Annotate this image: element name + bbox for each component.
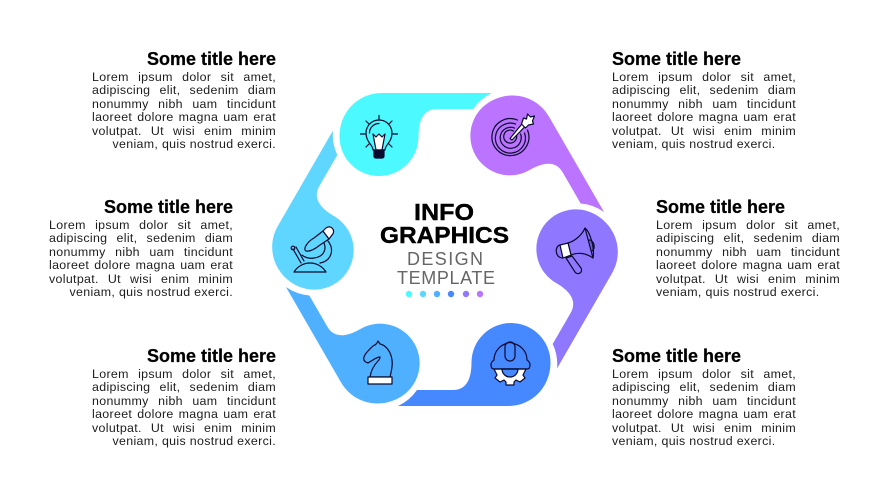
segment: purple [456,80,604,253]
text block: bottom left: Lorem ipsum dolor sit amet, [92,367,276,381]
center subtitle: DESIGN: DESIGN [407,249,483,269]
text block: middle left [49,197,233,299]
icon: microscope [291,227,334,272]
segment: cyan [340,93,492,176]
center title: INFO: INFO [414,199,474,225]
center title: GRAPHICS: GRAPHICS [380,222,509,248]
text block: middle left: adipiscing elit, sedenim diam [49,231,233,245]
icon: helmet with gear [491,342,530,385]
text block: bottom right: nonummy nibh uam tincidunt [612,394,796,408]
text block: bottom right: Some title here [612,346,741,366]
segment: light blue [257,131,405,304]
segment: blue [286,246,434,419]
text block: bottom left: nonummy nibh uam tincidunt [92,394,276,408]
text block: bottom left [92,346,276,448]
text block: middle right: laoreet dolore magna uam erat [656,258,840,272]
text block: middle right [656,197,840,299]
text block: top left: nonummy nibh uam tincidunt [92,97,276,111]
text block: bottom left: veniam, quis nostrud exerci. [112,434,276,448]
text block: middle left: nonummy nibh uam tincidunt [49,245,233,259]
text block: top right: laoreet dolore magna uam erat [612,110,796,124]
text block: middle left: Lorem ipsum dolor sit amet, [49,218,233,232]
text block: top left: volutpat. Ut wisi enim minim [92,124,276,138]
text block: top left: laoreet dolore magna uam erat [92,110,276,124]
text block: top right [612,49,796,151]
text block: middle left: laoreet dolore magna uam erat [49,258,233,272]
segment: violet [485,195,633,368]
text block: top left [92,49,276,151]
text block: bottom right: Lorem ipsum dolor sit amet, [612,367,796,381]
text block: top left: Some title here [147,49,276,69]
text block: middle right: volutpat. Ut wisi enim minim [656,272,840,286]
text block: middle right: Some title here [656,197,785,217]
text block: bottom left: adipiscing elit, sedenim diam [92,380,276,394]
text block: bottom right: veniam, quis nostrud exerci. [612,434,776,448]
text block: bottom right: volutpat. Ut wisi enim minim [612,421,796,435]
center subtitle: TEMPLATE: TEMPLATE [397,268,495,288]
icon: light bulb [360,116,398,158]
text block: top right: Some title here [612,49,741,69]
text block: middle left: Some title here [104,197,233,217]
text block: top left: Lorem ipsum dolor sit amet, [92,70,276,84]
text block: bottom right: adipiscing elit, sedenim diam [612,380,796,394]
text block: middle right: adipiscing elit, sedenim diam [656,231,840,245]
icon: megaphone [556,228,594,274]
text block: middle right: Lorem ipsum dolor sit amet, [656,218,840,232]
text block: top right: nonummy nibh uam tincidunt [612,97,796,111]
text block: top right: volutpat. Ut wisi enim minim [612,124,796,138]
text block: bottom right [612,346,796,448]
icon: target with arrow [492,114,534,156]
text block: top left: adipiscing elit, sedenim diam [92,83,276,97]
text block: bottom right: laoreet dolore magna uam erat [612,407,796,421]
text block: middle right: veniam, quis nostrud exerci. [656,285,820,299]
text block: top right: veniam, quis nostrud exerci. [612,137,776,151]
text block: top left: veniam, quis nostrud exerci. [112,137,276,151]
segment: royal blue [398,323,550,406]
text block: middle left: volutpat. Ut wisi enim minim [49,272,233,286]
text block: bottom left: volutpat. Ut wisi enim minim [92,421,276,435]
text block: bottom left: laoreet dolore magna uam erat [92,407,276,421]
text block: middle right: nonummy nibh uam tincidunt [656,245,840,259]
dots row [406,291,483,297]
text block: bottom left: Some title here [147,346,276,366]
icon: chess knight [364,341,392,384]
text block: top right: Lorem ipsum dolor sit amet, [612,70,796,84]
text block: top right: adipiscing elit, sedenim diam [612,83,796,97]
text block: middle left: veniam, quis nostrud exerci. [69,285,233,299]
